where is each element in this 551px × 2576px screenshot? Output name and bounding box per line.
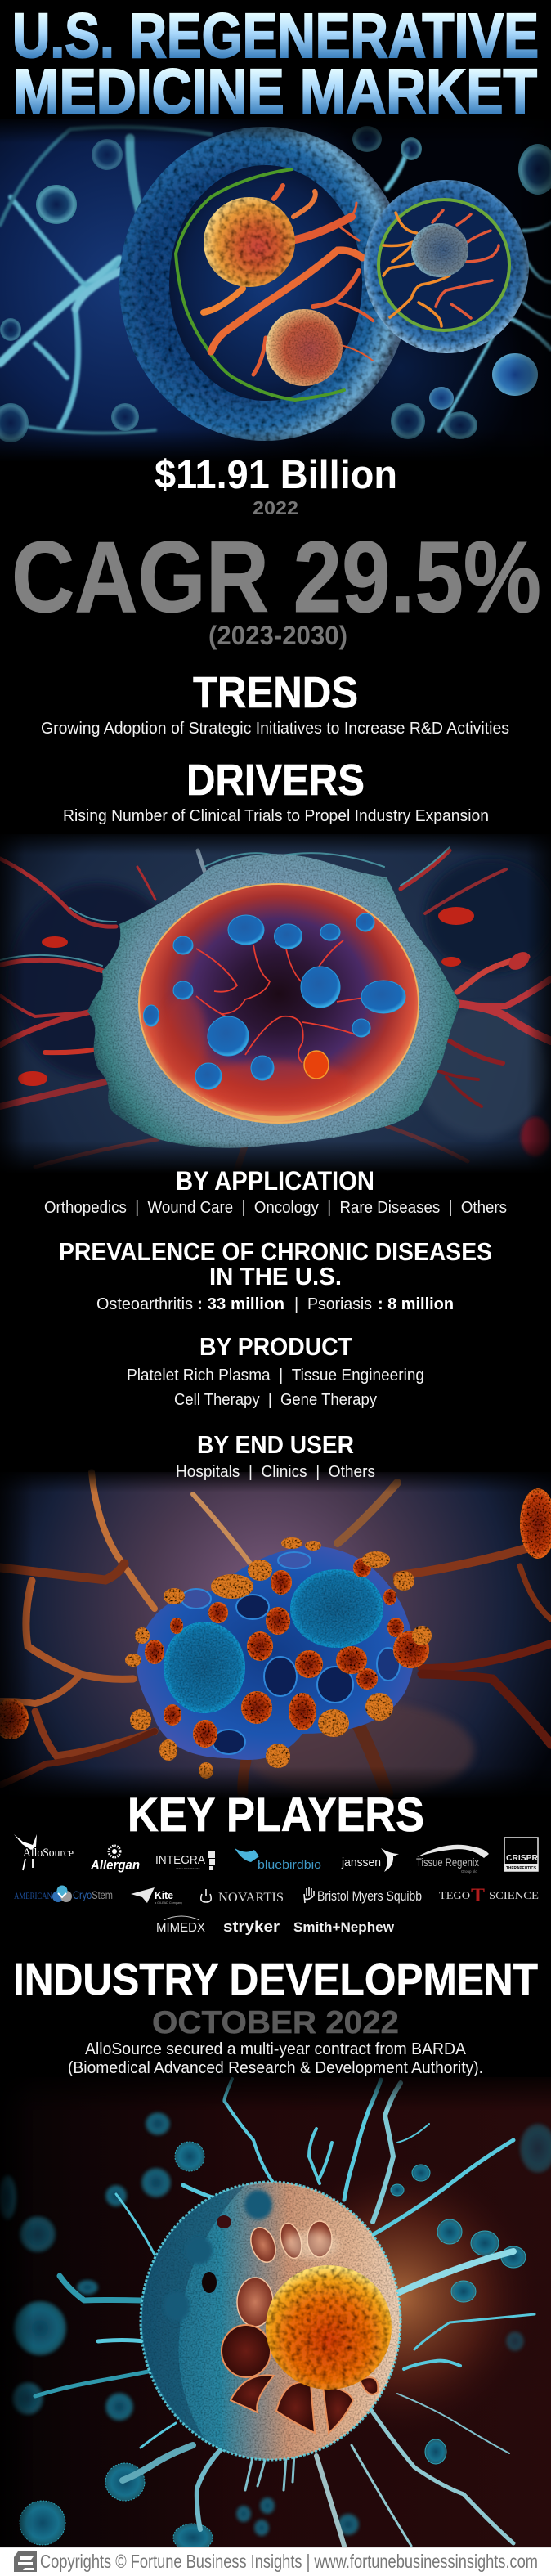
drivers: DRIVERS [186,756,365,805]
market size value [155,453,397,518]
teal tendril highlights [0,847,450,966]
logo: Tissue Regenix [416,1845,489,1874]
industry development: (Biomedical Advanced Research & Development Authority). [68,2058,483,2077]
blurred background vesicles [0,2112,551,2536]
by application: BY APPLICATION [176,1166,374,1196]
cytoplasm [87,854,460,1148]
logo: AlloSource: AlloSource [23,1847,74,1860]
logo: Allergan [90,1846,140,1873]
drivers: Rising Number of Clinical Trials to Propel Industry Expansion [63,807,489,825]
by application: Orthopedics | Wound Care | Oncology | Rare Diseases | Others [44,1199,507,1217]
logo: AlloSource [14,1834,74,1870]
image: cell with blue vesicles [0,830,551,1174]
by product: BY PRODUCT [199,1332,352,1361]
hero image: regenerative cells [0,114,551,462]
logo: American CryoStem: AMERICAN [14,1892,53,1901]
by product: Cell Therapy | Gene Therapy [174,1391,377,1409]
logo: Kite [131,1887,182,1905]
logo: CRISPR Therapeutics: THERAPEUTICS [506,1866,537,1871]
key players heading: KEY PLAYERS [128,1788,424,1842]
orange vesicle [304,1051,329,1079]
prevalence of chronic diseases: : 33 million [197,1295,284,1313]
industry development: OCTOBER 2022 [152,2005,399,2040]
red tendrils [0,850,551,1169]
icon: Fortune Business Insights logo [14,2551,37,2572]
industry development: AlloSource secured a multi-year contract from BARDA [85,2040,466,2058]
logo: MiMedx: MIMEDX [156,1921,205,1935]
nucleus upper [204,197,295,287]
logo: Novartis [201,1889,284,1905]
red blobs [18,907,550,1156]
logo: Janssen: janssen [341,1856,381,1869]
prevalence of chronic diseases: PREVALENCE OF CHRONIC DISEASES [59,1237,492,1266]
logo: bluebird bio: bluebirdbio [258,1858,321,1872]
drivers [63,756,489,825]
logo: American CryoStem [14,1886,113,1902]
logo: Janssen [341,1848,399,1872]
by product: Platelet Rich Plasma | Tissue Engineering [127,1367,424,1384]
by end user: BY END USER [197,1430,354,1459]
trends: TRENDS [193,668,358,717]
prevalence of chronic diseases: IN THE U.S. [209,1262,342,1290]
blue nuclei [164,1622,245,1713]
industry development [13,1955,538,2077]
logo: Allergan: Allergan [90,1857,140,1873]
nucleus lower [266,309,343,386]
logo: Tego Science: SCIENCE [489,1889,539,1901]
image: cell with orange clusters [0,1468,551,1799]
small cell [364,180,529,353]
prevalence of chronic diseases: | [294,1295,298,1313]
logo: Novartis: NOVARTIS [218,1891,284,1905]
background vesicles [0,126,551,442]
logo: Bristol Myers Squibb [304,1887,422,1904]
prevalence of chronic diseases: Psoriasis [307,1295,372,1313]
logo: Integra: LIMIT UNCERTAINTY [176,1867,200,1870]
cell branches [204,186,373,375]
logo: Kite: a GILEAD Company [155,1901,182,1905]
cyan filaments [35,2079,535,2546]
by product [127,1332,424,1409]
prevalence of chronic diseases [59,1237,492,1313]
logo: Tego Science: T [471,1885,485,1905]
market size value: $11.91 Billion [155,453,397,497]
market size value: 2022 [253,497,298,518]
nucleus [266,2265,392,2390]
logo: Bristol Myers Squibb: Bristol Myers Squibb [317,1889,422,1904]
body openings [237,2221,332,2327]
footer [0,2547,551,2576]
background strands [0,127,551,433]
dark spots on body [164,2190,272,2321]
side orange balls [520,1488,551,1559]
logo: CRISPR Therapeutics [504,1838,538,1871]
logo: American CryoStem: CryoStem [73,1889,113,1901]
prevalence of chronic diseases: Osteoarthritis [96,1295,193,1313]
image: immune cell with orange nucleus [0,2069,551,2551]
prevalence of chronic diseases: : 8 million [378,1295,454,1313]
logo: Tego Science: TEGO [439,1889,470,1901]
cell body [137,1546,414,1760]
logo: CRISPR Therapeutics: CRISPR [506,1853,538,1863]
title [12,1,539,127]
orange strands [0,1472,551,1793]
logo: Tissue Regenix: Tissue Regenix [416,1856,479,1869]
trends [41,668,509,738]
CAGR value: (2023-2030) [208,621,347,650]
trends: Growing Adoption of Strategic Initiatives to Increase R&D Activities [41,720,509,738]
logo: Tego Science [439,1885,539,1905]
sharp vesicles [20,2142,526,2551]
orange clusters [145,1558,429,1748]
logo: Smith+Nephew: Smith+Nephew [293,1919,395,1935]
key player logos [14,1834,539,1935]
by end user [176,1430,375,1481]
large cell [119,127,410,441]
cell body [141,2182,401,2460]
blue vesicles [144,913,405,1089]
by application [44,1166,507,1217]
logo: bluebird bio [235,1848,321,1872]
by end user: Hospitals | Clinics | Others [176,1463,375,1481]
logo: Integra: INTEGRA [155,1853,205,1867]
logo: Tissue Regenix: Group plc [461,1869,477,1874]
logo: Integra [155,1851,215,1870]
logo: Stryker: stryker [223,1919,280,1935]
nucleus [139,884,419,1123]
logo: Kite: Kite [155,1889,173,1901]
